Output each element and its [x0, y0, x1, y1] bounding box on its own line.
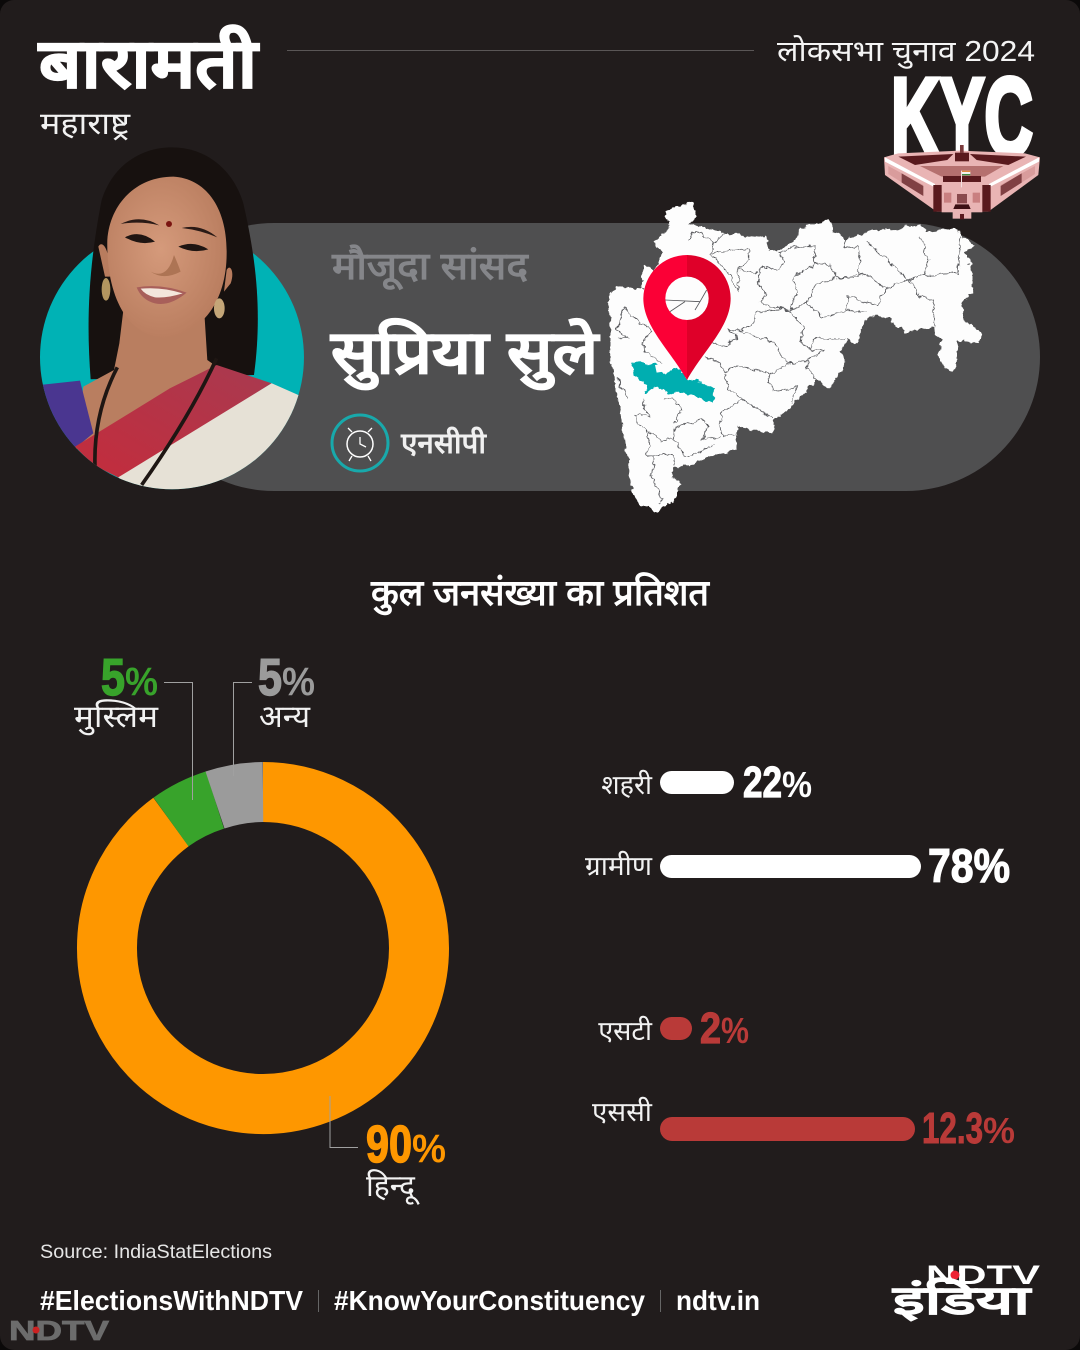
segment: Hindu 90%: [107, 792, 419, 1104]
bar: urban 22%: 22: [743, 758, 782, 807]
label: Hindu 90%: 90: [366, 1116, 412, 1174]
district borders: [617, 231, 960, 505]
segment: Muslim 5%: [171, 800, 215, 822]
icon: location pin shaded half: [687, 255, 731, 380]
title: बारामती: [37, 25, 260, 102]
bar: SC 12.3%: %: [983, 1110, 1015, 1151]
panel: current MP: [140, 223, 1040, 491]
label: Other 5%: [258, 649, 315, 734]
saree white drape: [118, 383, 298, 490]
label: Hindu 90%: %: [412, 1127, 446, 1171]
earrings: [102, 278, 110, 301]
logo: NDTV India: NDTV: [926, 1260, 1040, 1290]
hashtag: elections: #ElectionsWithNDTV: [40, 1285, 303, 1316]
logo: NDTV India: इंडिया: [891, 1277, 1033, 1323]
label: Muslim 5%: [74, 649, 158, 736]
blouse: [40, 381, 93, 448]
face: [107, 177, 227, 337]
label: Other 5%: 5: [258, 649, 282, 707]
website: ndtv.in: [676, 1285, 760, 1316]
neck and chest: [76, 312, 216, 449]
bar: urban 22%: [601, 758, 812, 807]
label: Muslim 5%: मुस्लिम: [74, 699, 158, 736]
header rule: [287, 50, 754, 51]
icon: parliament building: [884, 145, 1040, 219]
eyebrows: [121, 219, 217, 237]
election label: लोकसभा चुनाव 2024: [777, 35, 1035, 69]
district borders seen through pin hole: [665, 290, 707, 312]
state outline: [608, 203, 983, 512]
party name: एनसीपी: [400, 426, 488, 460]
smile: [137, 286, 187, 304]
source note: Source: IndiaStatElections: [40, 1241, 272, 1263]
hair: [89, 147, 258, 379]
party symbol: clock: [332, 415, 388, 471]
label: Other 5%: %: [282, 660, 315, 704]
hashtag: constituency: #KnowYourConstituency: [334, 1285, 645, 1316]
leader lines: [164, 682, 358, 1148]
bar: rural 78%: 78%: [928, 839, 1010, 892]
bar: ST 2%: [598, 1004, 749, 1053]
nose shadow: [151, 255, 181, 276]
label: Other 5%: अन्य: [259, 699, 311, 734]
bar: SC 12.3%: [592, 1096, 1015, 1153]
bar: rural 78%: [585, 839, 1010, 892]
heading: percent of total population: कुल जनसंख्या का प्रतिशत: [370, 572, 710, 616]
icon: location pin: [643, 255, 687, 380]
label: Hindu 90%: [366, 1116, 446, 1205]
bar: urban 22%: %: [782, 764, 812, 805]
ears: [98, 244, 232, 292]
watermark: NDTV: NDTV: [9, 1315, 109, 1346]
donut chart: [107, 792, 419, 1104]
saree border: [75, 365, 272, 478]
bar: SC 12.3%: 12.3: [922, 1104, 983, 1153]
label: current MP: मौजूदा सांसद: [331, 244, 530, 291]
bar: ST 2%: 2: [700, 1004, 721, 1053]
lake inside constituency: [655, 364, 663, 373]
bar: ST 2%: एसटी: [598, 1015, 653, 1046]
bar: rural 78%: ग्रामीण: [585, 850, 652, 881]
label: Muslim 5%: %: [125, 660, 158, 704]
necklace: [95, 358, 217, 485]
logo: NDTV India: [891, 1260, 1040, 1323]
bar: urban 22%: शहरी: [601, 769, 653, 800]
label: Hindu 90%: हिन्दू: [366, 1169, 420, 1205]
bar: SC 12.3%: एससी: [592, 1096, 653, 1127]
bar: ST 2%: %: [721, 1010, 749, 1051]
segment: Other 5%: [215, 792, 263, 800]
MP name: सुप्रिया सुले: [330, 318, 601, 391]
bindi: [166, 221, 172, 227]
map: Maharashtra: [608, 203, 983, 512]
subtitle: state: महाराष्ट्र: [40, 106, 131, 141]
label: Muslim 5%: 5: [101, 649, 125, 707]
highlighted constituency: [633, 363, 715, 403]
KYC logo: [884, 56, 1040, 219]
portrait: [40, 147, 310, 500]
portrait backdrop circle: [40, 225, 304, 489]
eyes: [125, 234, 208, 251]
